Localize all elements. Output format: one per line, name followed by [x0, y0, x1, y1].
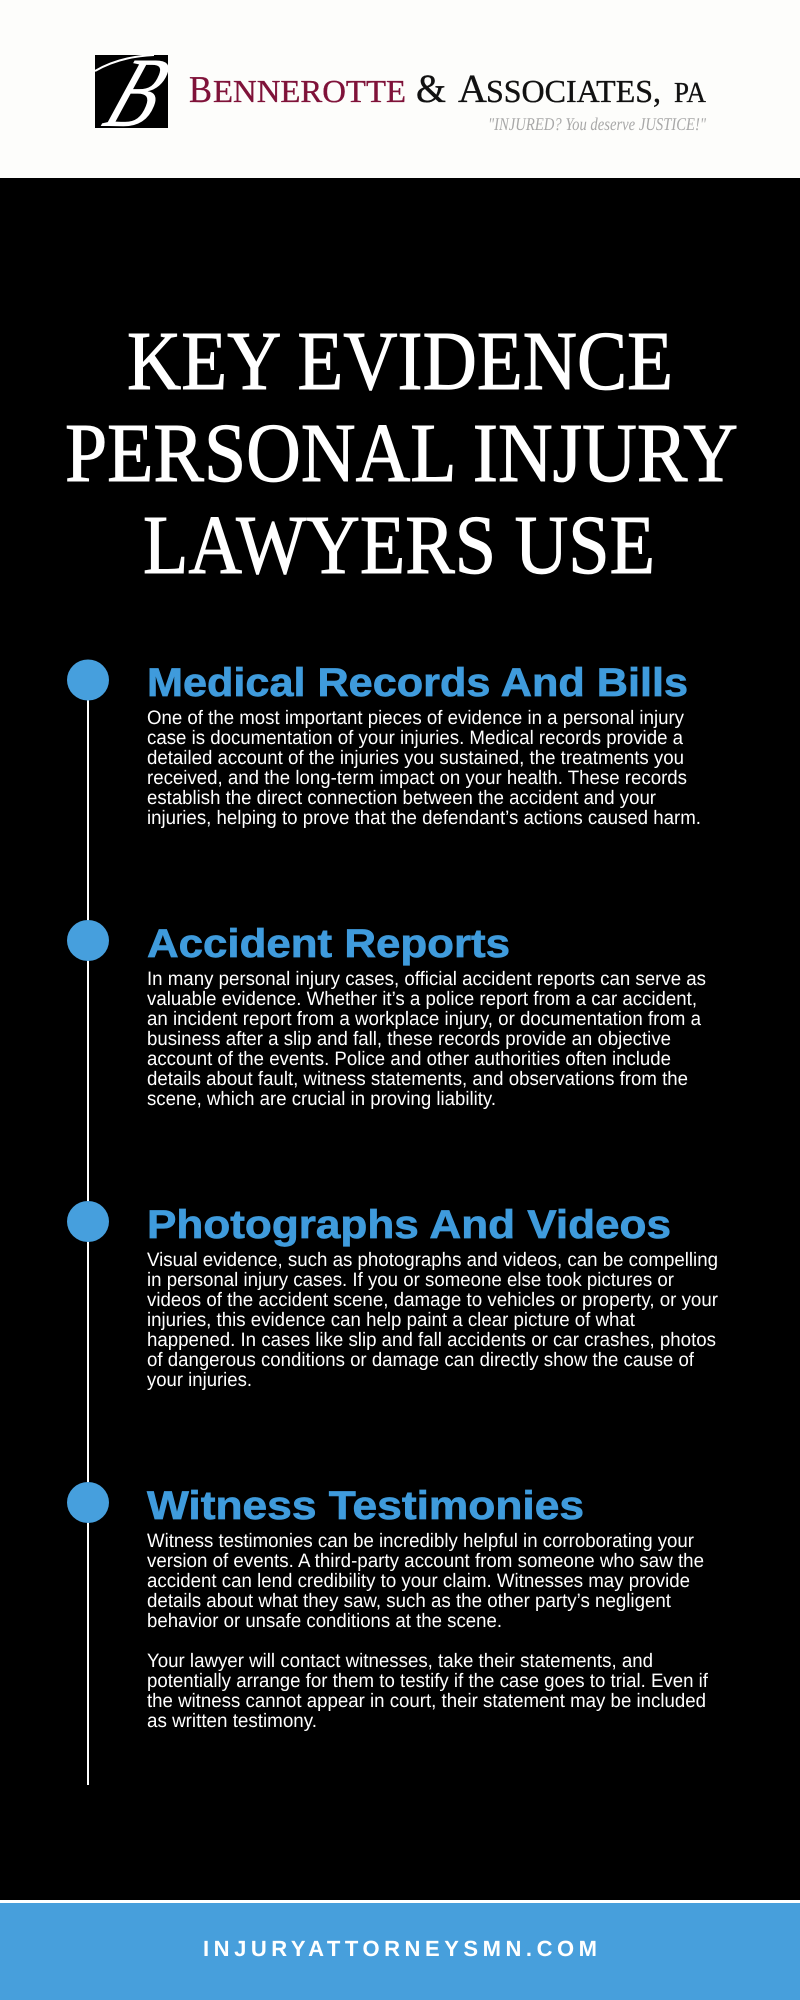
heading: Photographs And Videos — [147, 1203, 671, 1247]
firm name — [189, 66, 706, 111]
body text — [147, 707, 701, 829]
marker — [67, 920, 109, 961]
section: photographs and videos — [67, 1201, 718, 1391]
heading: Accident Reports — [147, 922, 510, 966]
title: KEY EVIDENCE — [127, 315, 673, 408]
marker — [67, 660, 109, 700]
body text: in personal injury cases. If you or someone else took pictures or — [147, 1269, 674, 1291]
title: PERSONAL INJURY — [65, 407, 738, 500]
body text: an incident report from a workplace injury, or documentation from a — [147, 1008, 701, 1030]
body text: Your lawyer will contact witnesses, take their statements, and — [147, 1650, 653, 1672]
timeline line — [87, 690, 89, 1785]
body text: of dangerous conditions or damage can directly show the cause of — [147, 1349, 695, 1371]
body text: injuries, helping to prove that the defendant’s actions caused harm. — [147, 807, 701, 829]
body text: details about fault, witness statements, and observations from the — [147, 1068, 688, 1090]
body text: accident can lend credibility to your claim. Witnesses may provide — [147, 1570, 690, 1592]
body text: received, and the long-term impact on your health. These records — [147, 767, 687, 789]
body text: as written testimony. — [147, 1710, 317, 1732]
body text: Witness testimonies can be incredibly helpful in corroborating your — [147, 1530, 694, 1552]
body text: scene, which are crucial in proving liability. — [147, 1088, 496, 1110]
firm name: B — [189, 69, 212, 111]
marker — [67, 1201, 109, 1242]
heading: Witness Testimonies — [147, 1484, 584, 1528]
body text: details about what they saw, such as the other party’s negligent — [147, 1590, 672, 1612]
section: medical records — [67, 660, 701, 829]
header: logo band — [0, 0, 800, 178]
firm name: ENNEROTTE — [213, 73, 406, 109]
title — [65, 315, 738, 592]
footer band — [0, 1900, 800, 2000]
body text: case is documentation of your injuries. Medical records provide a — [147, 727, 683, 749]
body text: version of events. A third-party account from someone who saw the — [147, 1550, 704, 1572]
body text: business after a slip and fall, these records provide an objective — [147, 1028, 671, 1050]
body text: account of the events. Police and other authorities often include — [147, 1048, 671, 1070]
body text: detailed account of the injuries you sustained, the treatments you — [147, 747, 684, 769]
body text: In many personal injury cases, official accident reports can serve as — [147, 968, 706, 990]
body text — [147, 1249, 718, 1391]
body text — [147, 968, 706, 1110]
logo mark: B — [91, 37, 184, 148]
body text: videos of the accident scene, damage to vehicles or property, or your — [147, 1289, 718, 1311]
firm name: A — [458, 66, 487, 111]
body text: One of the most important pieces of evidence in a personal injury — [147, 707, 684, 729]
body text — [147, 1530, 709, 1732]
title: LAWYERS USE — [143, 499, 655, 592]
body text: behavior or unsafe conditions at the scene. — [147, 1610, 502, 1632]
body text: the witness cannot appear in court, their statement may be included — [147, 1690, 706, 1712]
firm name: PA — [674, 77, 706, 109]
tagline: "INJURED? You deserve JUSTICE!" — [488, 114, 706, 134]
body text: your injuries. — [147, 1369, 252, 1391]
footer url: INJURYATTORNEYSMN.COM — [203, 1936, 597, 1961]
section: witness testimonies — [67, 1482, 709, 1732]
firm name: SSOCIATES, — [486, 73, 661, 109]
body text: valuable evidence. Whether it’s a police report from a car accident, — [147, 988, 697, 1010]
body text: happened. In cases like slip and fall accidents or car crashes, photos — [147, 1329, 716, 1351]
body text: potentially arrange for them to testify if the case goes to trial. Even if — [147, 1670, 709, 1692]
heading: Medical Records And Bills — [147, 661, 688, 705]
body text: establish the direct connection between the accident and your — [147, 787, 656, 809]
marker — [67, 1482, 109, 1523]
firm name: & — [416, 66, 446, 111]
body text: injuries, this evidence can help paint a clear picture of what — [147, 1309, 636, 1331]
logo mark — [95, 55, 168, 128]
body text: Visual evidence, such as photographs and videos, can be compelling — [147, 1249, 718, 1271]
section: accident reports — [67, 920, 706, 1110]
